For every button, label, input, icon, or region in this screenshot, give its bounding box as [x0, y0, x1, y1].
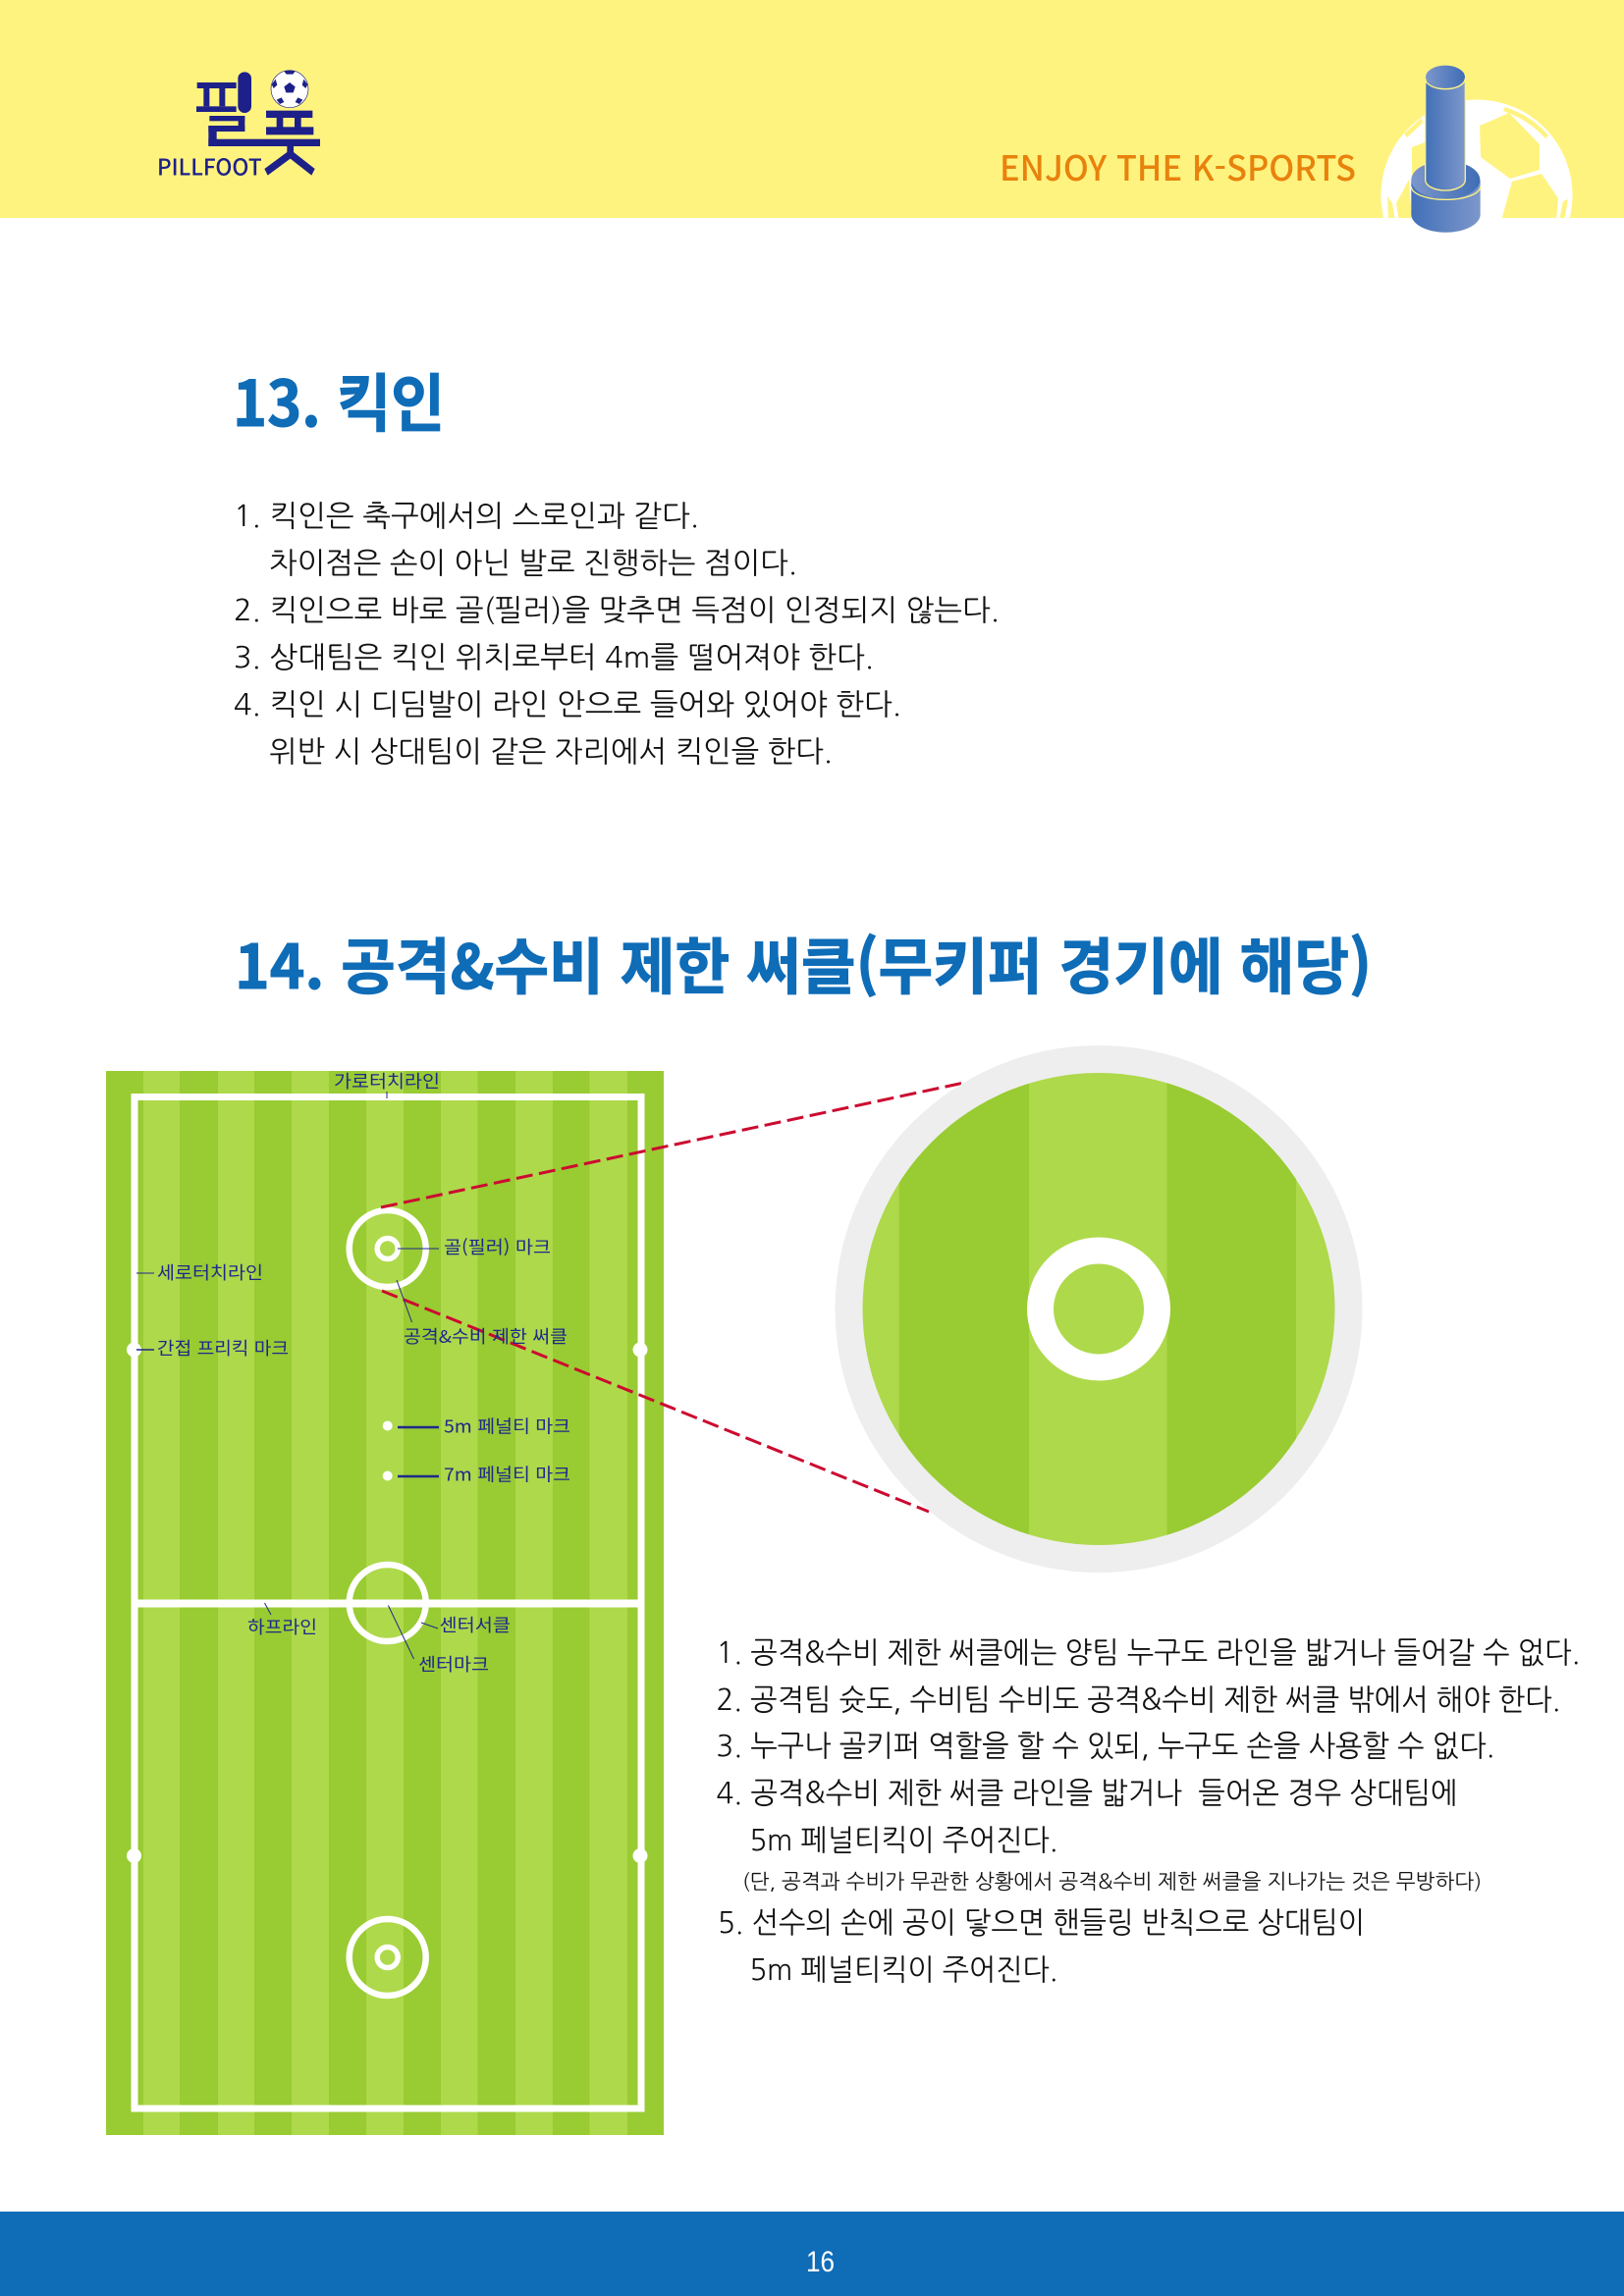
field labels with leader lines: 간접 프리킥 마크 [157, 1335, 289, 1361]
field labels with leader lines: 센터서클 [440, 1612, 511, 1637]
text block: circle rules: 5. 선수의 손에 공이 닿으면 핸들링 반칙으로 상대팀이 [718, 1908, 1365, 1938]
field labels with leader lines: 골(필러) 마크 [444, 1234, 551, 1259]
logo: PILLFOOT: PILLFOOT [157, 148, 262, 182]
text block: kick-in rules: 위반 시 상대팀이 같은 자리에서 킥인을 한다. [269, 736, 833, 767]
slogan: ENJOY THE K-SPORTS [1000, 141, 1356, 191]
text block: kick-in rules: 3. 상대팀은 킥인 위치로부터 4m를 떨어져야 한다. [234, 643, 874, 672]
text block: circle rules: 3. 누구나 골키퍼 역할을 할 수 있되, 누구도 손을 사용할 수 없다. [717, 1731, 1494, 1761]
field labels with leader lines: 센터마크 [418, 1651, 489, 1677]
heading: 14: 14. 공격&수비 제한 써클(무키퍼 경기에 해당) [235, 918, 1372, 1006]
field labels with leader lines [136, 1068, 570, 1677]
icon: pillar [1411, 66, 1481, 233]
text block: kick-in rules [234, 502, 1000, 767]
text block: kick-in rules: 4. 킥인 시 디딤발이 라인 안으로 들어와 있어야 한다. [234, 690, 901, 720]
text block: circle rules: 5m 페널티킥이 주어진다. [750, 1826, 1058, 1855]
panel: soccer field diagram [106, 1071, 664, 2135]
text block: kick-in rules: 2. 킥인으로 바로 골(필러)을 맞추면 득점이 인정되지 않는다. [234, 595, 1000, 625]
header band [0, 0, 1624, 218]
icon: soccer ball behind pillar [1380, 100, 1573, 218]
text block: circle rules: 2. 공격팀 슛도, 수비팀 수비도 공격&수비 제한 써클 밖에서 해야 한다. [717, 1685, 1561, 1715]
panel: magnified circle [835, 1045, 1363, 1573]
text block: circle rules [717, 1637, 1581, 1985]
logo: PILLFOOT [157, 71, 320, 182]
field labels with leader lines: 가로터치라인 [334, 1068, 440, 1094]
text block: circle rules: 1. 공격&수비 제한 써클에는 양팀 누구도 라인을 밟거나 들어갈 수 없다. [717, 1637, 1581, 1668]
field labels with leader lines: 하프라인 [247, 1614, 317, 1639]
field labels with leader lines: 7m 페널티 마크 [444, 1461, 570, 1486]
text block: circle rules: (단, 공격과 수비가 무관한 상황에서 공격&수비 제한 써클을 지나가는 것은 무방하다) [742, 1871, 1482, 1893]
field labels with leader lines: 공격&수비 제한 써클 [404, 1323, 568, 1349]
callout: red dashed zoom lines [381, 1084, 961, 1512]
field labels with leader lines: 5m 페널티 마크 [444, 1414, 570, 1439]
text block: kick-in rules: 차이점은 손이 아닌 발로 진행하는 점이다. [269, 549, 797, 578]
footer band [0, 2212, 1624, 2296]
text block: kick-in rules: 1. 킥인은 축구에서의 스로인과 같다. [234, 502, 699, 531]
heading: 13: 13. 킥인 [233, 354, 445, 445]
text block: circle rules: 4. 공격&수비 제한 써클 라인을 밟거나 들어온 경우 상대팀에 [717, 1778, 1457, 1808]
page number: 16 [806, 2246, 835, 2278]
text block: circle rules: 5m 페널티킥이 주어진다. [750, 1955, 1058, 1985]
field labels with leader lines: 세로터치라인 [157, 1259, 263, 1285]
